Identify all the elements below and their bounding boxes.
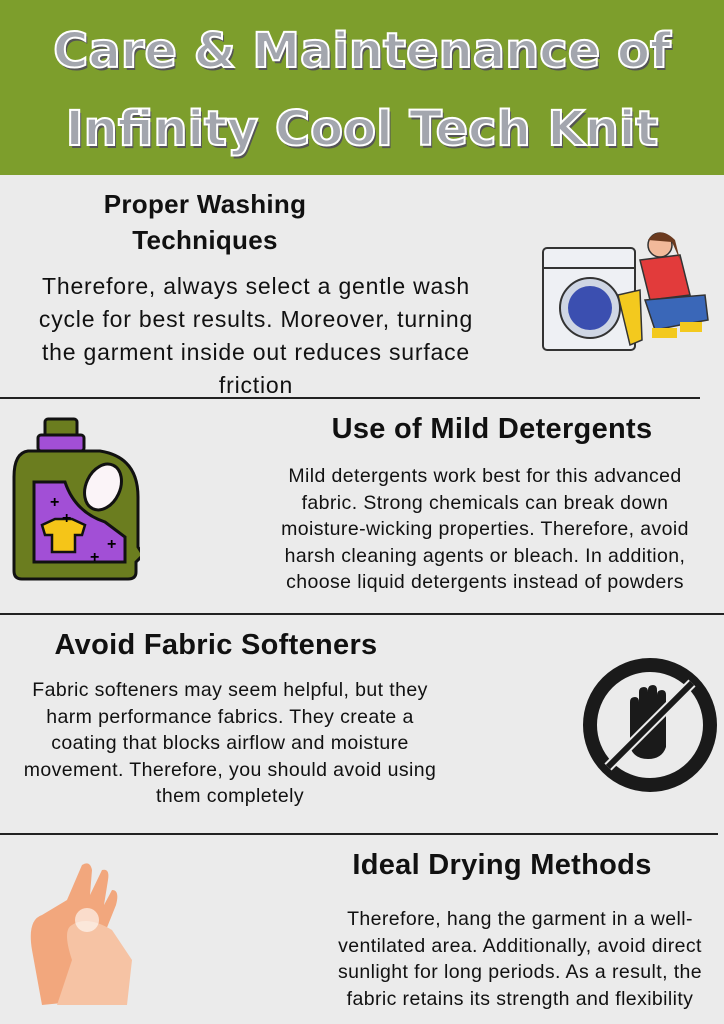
- text: washing: cycle for best results. Moreover, turning: [39, 306, 473, 332]
- icon: hands: [30, 863, 132, 1005]
- icon: detergent bottle: +: [90, 549, 99, 566]
- text: drying: Therefore, hang the garment in a well-: [347, 908, 693, 930]
- title: Infinity Cool Tech Knit: [66, 101, 658, 157]
- text: softeners: coating that blocks airflow and moisture: [51, 732, 409, 754]
- icon: detergent bottle: +: [107, 536, 116, 553]
- text: washing: [39, 273, 473, 398]
- text: detergents: harsh cleaning agents or bleach. In addition,: [285, 544, 685, 566]
- header banner: [0, 0, 724, 175]
- panel: drying: [30, 849, 702, 1010]
- heading: washing: Proper Washing: [104, 189, 306, 219]
- heading: drying: Ideal Drying Methods: [352, 849, 652, 881]
- text: drying: fabric retains its strength and flexibility: [347, 988, 693, 1010]
- text: detergents: Mild detergents work best for this advanced: [288, 465, 682, 487]
- text: washing: Therefore, always select a gentle wash: [42, 273, 470, 299]
- text: drying: ventilated area. Additionally, avoid direct: [338, 934, 702, 956]
- text: detergents: moisture-wicking properties. Therefore, avoid: [281, 518, 689, 540]
- text: softeners: movement. Therefore, you should avoid using: [24, 758, 436, 780]
- panel: detergents: [12, 413, 689, 593]
- text: washing: the garment inside out reduces surface: [42, 339, 470, 365]
- text: drying: sunlight for long periods. As a result, the: [338, 961, 702, 983]
- icon: no hand: [583, 658, 717, 792]
- heading: washing: Techniques: [132, 225, 278, 255]
- heading: detergents: Use of Mild Detergents: [332, 413, 652, 445]
- text: softeners: Fabric softeners may seem helpful, but they: [32, 679, 428, 701]
- text: softeners: them completely: [156, 785, 304, 807]
- text: detergents: choose liquid detergents instead of powders: [286, 571, 684, 593]
- title: [53, 23, 674, 158]
- panel: softeners: [24, 629, 717, 807]
- text: softeners: [24, 679, 436, 807]
- text: washing: friction: [219, 372, 293, 398]
- title: Care & Maintenance of: [53, 23, 671, 79]
- icon: detergent bottle: [12, 418, 140, 580]
- text: softeners: harm performance fabrics. They create a: [46, 706, 414, 728]
- heading: washing: [104, 189, 306, 255]
- text: detergents: [281, 465, 689, 593]
- icon: detergent bottle: +: [62, 510, 71, 527]
- heading: softeners: Avoid Fabric Softeners: [54, 629, 377, 661]
- panel: washing: [39, 189, 709, 398]
- text: drying: [338, 908, 702, 1010]
- icon: washing machine person: [542, 232, 709, 351]
- text: detergents: fabric. Strong chemicals can break down: [302, 492, 668, 514]
- icon: detergent bottle: +: [50, 494, 59, 511]
